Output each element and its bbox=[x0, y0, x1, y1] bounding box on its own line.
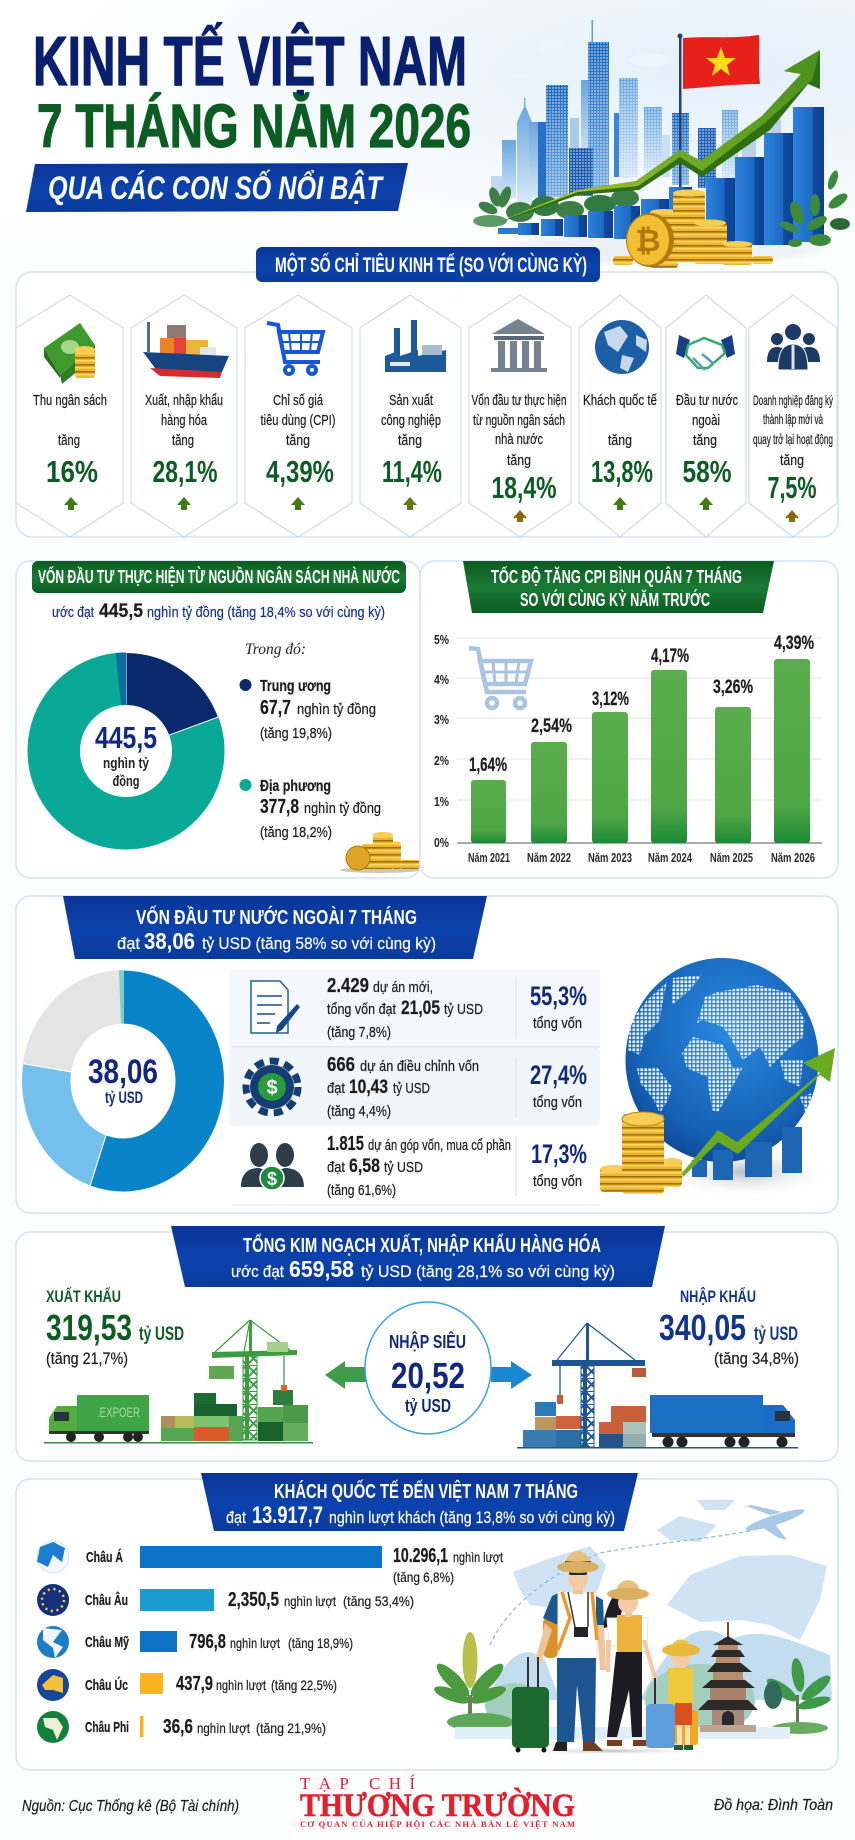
row: adjusted capital: tổng vốn bbox=[533, 1094, 582, 1111]
bar chart: 1% bbox=[434, 794, 449, 809]
card: international visitors: tăng bbox=[608, 432, 632, 449]
row: Americas: nghìn lượt bbox=[230, 1635, 280, 1651]
donut chart: nghìn tỷ bbox=[103, 755, 150, 772]
trade deficit circle: NHẬP SIÊU bbox=[389, 1331, 466, 1352]
arrow bbox=[513, 510, 527, 522]
card: enterprises: 7,5% bbox=[768, 470, 816, 505]
heading: VỐN ĐẦU TƯ NƯỚC NGOÀI 7 THÁNG bbox=[136, 905, 417, 929]
row: adjusted capital: (tăng 4,4%) bbox=[327, 1103, 391, 1120]
row: Europe: nghìn lượt bbox=[284, 1593, 336, 1609]
trade deficit circle bbox=[365, 1302, 491, 1434]
imports figures: 340,05 bbox=[659, 1307, 746, 1348]
illustration: export port bbox=[44, 1320, 313, 1444]
bar chart: 5% bbox=[434, 632, 449, 647]
icon: business people bbox=[767, 324, 820, 370]
row: capital contributions: (tăng 61,6%) bbox=[327, 1182, 396, 1199]
footer: magazine logo bbox=[300, 1774, 575, 1829]
row: new projects: dự án mới, bbox=[373, 979, 433, 996]
legend: 67,7 bbox=[260, 697, 291, 719]
row: capital contributions: 1.815 bbox=[327, 1133, 364, 1155]
card: import export: hàng hóa bbox=[161, 412, 207, 429]
card: CPI: tiêu dùng (CPI) bbox=[260, 412, 336, 429]
row: capital contributions: đạt bbox=[327, 1159, 346, 1176]
card: import export: Xuất, nhập khẩu bbox=[145, 392, 223, 409]
icon: bank building bbox=[491, 319, 547, 372]
suitcase: yellow bbox=[675, 1710, 698, 1745]
heading: tỷ USD (tăng 28,1% so với cùng kỳ) bbox=[361, 1262, 615, 1281]
row: Asia: 10.296,1 bbox=[393, 1545, 448, 1567]
row: Americas: (tăng 18,9%) bbox=[288, 1635, 353, 1651]
card: state budget investment: tăng bbox=[507, 452, 531, 469]
footer: credit: Đồ họa: Đình Toàn bbox=[714, 1797, 833, 1814]
card: budget revenue: 16% bbox=[46, 454, 98, 489]
trade deficit circle: tỷ USD bbox=[405, 1396, 451, 1416]
legend: (tăng 18,2%) bbox=[260, 824, 332, 841]
row: Oceania bbox=[37, 1669, 337, 1701]
card: enterprises bbox=[749, 295, 837, 537]
heading: tỷ USD (tăng 58% so với cùng kỳ) bbox=[202, 934, 436, 953]
row backgrounds bbox=[229, 970, 600, 1205]
panel: economic indicators bbox=[16, 247, 838, 537]
card: industry: tăng bbox=[398, 432, 422, 449]
icon: Americas globe bbox=[37, 1626, 69, 1658]
suitcase: blue bbox=[646, 1678, 675, 1748]
arrow bbox=[291, 497, 305, 510]
arrow bbox=[177, 497, 191, 510]
bar chart: 4,39% bbox=[774, 633, 814, 654]
bar chart: Năm 2025 bbox=[710, 851, 753, 865]
card: state budget investment: từ nguồn ngân sách bbox=[473, 412, 565, 429]
pagoda bbox=[698, 1622, 758, 1732]
icon: shopping cart bbox=[469, 648, 531, 708]
card: foreign investment: Đầu tư nước bbox=[676, 392, 738, 409]
panel: state budget investment bbox=[16, 561, 420, 878]
row: capital contributions: dự án góp vốn, mua cổ phần bbox=[368, 1137, 511, 1154]
airplane bbox=[744, 1505, 806, 1540]
bar chart: 3,26% bbox=[713, 677, 753, 698]
card: budget revenue bbox=[16, 295, 123, 537]
plant right bbox=[778, 169, 850, 247]
bar chart: Năm 2022 bbox=[527, 851, 571, 865]
row: Asia: nghìn lượt bbox=[453, 1549, 503, 1565]
heading bbox=[171, 1226, 665, 1287]
water bbox=[455, 1727, 790, 1739]
growth arrow bbox=[682, 1048, 835, 1177]
heading: TỐC ĐỘ TĂNG CPI BÌNH QUÂN 7 THÁNG bbox=[491, 566, 742, 587]
row: Africa: 36,6 bbox=[163, 1716, 193, 1738]
bar chart: Năm 2021 bbox=[468, 851, 510, 865]
crane bbox=[209, 1320, 297, 1440]
bar chart: 3,12% bbox=[592, 689, 629, 710]
row: adjusted capital: 27,4% bbox=[530, 1060, 587, 1090]
title block bbox=[26, 21, 471, 212]
row: Asia: Châu Á bbox=[86, 1549, 123, 1566]
row: adjusted capital bbox=[246, 1054, 587, 1120]
card: foreign investment: tăng bbox=[693, 432, 717, 449]
heading: ước đạt bbox=[231, 1262, 284, 1281]
heading: 659,58 bbox=[289, 1256, 354, 1282]
skyline bbox=[491, 20, 781, 206]
card: import export: tăng bbox=[172, 432, 194, 449]
imports figures: tỷ USD bbox=[754, 1324, 798, 1345]
imports figures: (tăng 34,8%) bbox=[714, 1349, 799, 1368]
header illustration: city, bars, arrow, flag, coins bbox=[465, 20, 855, 270]
heading: KHÁCH QUỐC TẾ ĐẾN VIỆT NAM 7 THÁNG bbox=[274, 1479, 578, 1503]
world map bbox=[513, 1500, 827, 1640]
donut chart: đồng bbox=[112, 773, 140, 790]
card: import export: 28,1% bbox=[152, 454, 218, 489]
icon: earth bbox=[595, 320, 649, 374]
icon: Oceania globe bbox=[37, 1669, 69, 1701]
panel: foreign investment bbox=[16, 896, 838, 1213]
card: budget revenue: tăng bbox=[58, 432, 80, 449]
growth arrow bbox=[498, 50, 820, 223]
bar chart: 4% bbox=[434, 672, 449, 687]
card: international visitors bbox=[579, 295, 661, 537]
coins bbox=[613, 190, 773, 268]
clouds bbox=[513, 42, 670, 80]
row: adjusted capital: 10,43 bbox=[349, 1077, 388, 1098]
row: capital contributions: tổng vốn bbox=[533, 1173, 582, 1190]
card: CPI: tăng bbox=[286, 432, 310, 449]
row: Oceania: Châu Úc bbox=[85, 1676, 128, 1694]
suitcase: green bbox=[512, 1657, 549, 1752]
exports figures: tỷ USD bbox=[139, 1324, 184, 1345]
heading bbox=[201, 1473, 638, 1531]
row: capital contributions: 17,3% bbox=[531, 1139, 587, 1169]
legend: (tăng 19,8%) bbox=[260, 725, 332, 742]
card: state budget investment bbox=[469, 295, 571, 537]
row: Oceania: 437,9 bbox=[176, 1673, 213, 1695]
flag pole bbox=[678, 34, 682, 187]
truck bbox=[49, 1395, 149, 1442]
trade deficit circle: 20,52 bbox=[391, 1355, 465, 1396]
illustration: world map and travel family bbox=[432, 1500, 834, 1755]
icon: document and pen bbox=[251, 981, 300, 1033]
imports figures bbox=[659, 1287, 799, 1368]
heading: TỔNG KIM NGẠCH XUẤT, NHẬP KHẨU HÀNG HÓA bbox=[243, 1233, 601, 1257]
subtitle banner: QUA CÁC CON SỐ NỔI BẬT bbox=[48, 170, 384, 206]
row: adjusted capital: dự án điều chỉnh vốn bbox=[360, 1058, 479, 1075]
icon: handshake bbox=[676, 335, 735, 370]
row: new projects: 21,05 bbox=[401, 998, 440, 1019]
exports figures: 319,53 bbox=[46, 1307, 132, 1348]
icon: investors with dollar: $ bbox=[267, 1169, 277, 1189]
foliage bbox=[473, 185, 639, 227]
arrow bbox=[699, 497, 713, 510]
heading: VỐN ĐẦU TƯ THỰC HIỆN TỪ NGUỒN NGÂN SÁCH NHÀ NƯỚC bbox=[38, 566, 400, 587]
bar chart: 2% bbox=[434, 753, 449, 768]
row: Africa: Châu Phi bbox=[85, 1719, 129, 1736]
legend: Trung ương bbox=[260, 678, 331, 695]
card: CPI: 4,39% bbox=[266, 454, 334, 489]
icon: cargo ship bbox=[143, 322, 229, 378]
row: Oceania: (tăng 22,5%) bbox=[271, 1677, 337, 1693]
row: new projects: tổng vốn đạt bbox=[327, 1001, 397, 1018]
row: adjusted capital: 666 bbox=[327, 1054, 355, 1076]
subheading bbox=[52, 601, 385, 622]
card: industry bbox=[360, 295, 461, 537]
legend: nghìn tỷ đồng bbox=[297, 701, 376, 718]
legend: 377,8 bbox=[260, 796, 299, 818]
footer: magazine logo: THƯƠNG TRƯỜNG bbox=[300, 1786, 575, 1824]
footer: source: Nguồn: Cục Thống kê (Bộ Tài chính) bbox=[22, 1798, 239, 1815]
panel: international visitors bbox=[16, 1473, 838, 1770]
icon: coins bbox=[340, 832, 420, 873]
row: Europe: Châu Âu bbox=[85, 1591, 128, 1609]
bar chart: 1,64% bbox=[469, 755, 507, 776]
heading: đạt bbox=[117, 934, 140, 953]
card: CPI: Chỉ số giá bbox=[273, 392, 323, 409]
row: Americas bbox=[37, 1626, 353, 1658]
subheading: ước đạt bbox=[52, 604, 95, 621]
containers bbox=[161, 1390, 308, 1441]
heading pill: MỘT SỐ CHỈ TIÊU KINH TẾ (SO VỚI CÙNG KỲ) bbox=[275, 253, 587, 277]
footer: magazine logo: TẠP CHÍ bbox=[300, 1774, 415, 1793]
coins: ₿ bbox=[635, 223, 661, 258]
bar chart: Năm 2026 bbox=[771, 851, 815, 865]
card: enterprises: tăng bbox=[780, 452, 804, 469]
subheading: 445,5 bbox=[99, 601, 143, 622]
person: man bbox=[535, 1551, 606, 1751]
icon: Africa globe bbox=[37, 1711, 69, 1743]
bar chart bbox=[434, 632, 822, 865]
person: woman bbox=[604, 1580, 658, 1746]
arrow bbox=[613, 497, 627, 510]
card: industry: 11,4% bbox=[382, 454, 442, 489]
card: CPI bbox=[245, 295, 352, 537]
footer: magazine logo: CƠ QUAN CỦA HIỆP HỘI CÁC NHÀ BÁN LẺ VIỆT NAM bbox=[300, 1819, 575, 1829]
icon: money and coins bbox=[44, 323, 95, 384]
legend: Địa phương bbox=[260, 778, 331, 795]
heading pill bbox=[256, 247, 600, 282]
donut chart: 38,06 bbox=[88, 1053, 158, 1091]
palm left bbox=[432, 1632, 513, 1731]
subheading: nghìn tỷ đồng (tăng 18,4% so với cùng kỳ) bbox=[147, 604, 385, 621]
title: line 1: KINH TẾ VIỆT NAM bbox=[33, 21, 467, 100]
row: new projects: tỷ USD bbox=[444, 1001, 483, 1018]
imports figures: NHẬP KHẨU bbox=[680, 1287, 756, 1306]
heading: nghìn lượt khách (tăng 13,8% so với cùng kỳ) bbox=[329, 1508, 615, 1527]
card: import export bbox=[131, 295, 237, 537]
heading: đạt bbox=[226, 1508, 246, 1527]
icon: gear with dollar: $ bbox=[266, 1077, 278, 1099]
panel: import export bbox=[16, 1226, 838, 1461]
arrow bbox=[785, 510, 799, 522]
heading: 38,06 bbox=[144, 928, 195, 954]
illustration: import port bbox=[517, 1323, 798, 1448]
heading: 13.917,7 bbox=[252, 1502, 323, 1529]
icon: Asia globe bbox=[37, 1541, 69, 1573]
card: international visitors: Khách quốc tế bbox=[583, 392, 658, 409]
row: capital contributions: 6,58 bbox=[349, 1156, 380, 1177]
card: budget revenue: Thu ngân sách bbox=[33, 392, 107, 409]
icon: Europe globe bbox=[37, 1584, 69, 1616]
heading: SO VỚI CÙNG KỲ NĂM TRƯỚC bbox=[520, 589, 710, 610]
row: Asia bbox=[37, 1541, 503, 1585]
arrow: left green bbox=[325, 1361, 366, 1389]
card: foreign investment: 58% bbox=[682, 454, 732, 489]
bar chart: Năm 2023 bbox=[588, 851, 632, 865]
legend: nghìn tỷ đồng bbox=[304, 800, 381, 817]
containers bbox=[523, 1402, 646, 1447]
title: line 2: 7 THÁNG NĂM 2026 bbox=[37, 92, 471, 160]
heading bbox=[463, 561, 774, 613]
row: Oceania: nghìn lượt bbox=[216, 1677, 266, 1693]
truck: .EXPOER bbox=[97, 1404, 140, 1420]
row: Africa: (tăng 21,9%) bbox=[256, 1720, 326, 1736]
card: foreign investment bbox=[666, 295, 746, 537]
row: capital contributions bbox=[241, 1133, 587, 1199]
bar chart: 2,54% bbox=[531, 716, 572, 737]
coins bbox=[600, 1112, 682, 1194]
subtitle banner bbox=[26, 163, 408, 212]
crane bbox=[552, 1323, 646, 1447]
bar chart: Năm 2024 bbox=[648, 851, 692, 865]
card: foreign investment: ngoài bbox=[692, 412, 720, 429]
donut chart: tỷ USD bbox=[105, 1088, 143, 1107]
arrow bbox=[64, 497, 78, 510]
exports figures: (tăng 21,7%) bbox=[46, 1349, 128, 1368]
row: Asia: (tăng 6,8%) bbox=[393, 1569, 454, 1585]
flag bbox=[683, 35, 760, 89]
row: new projects bbox=[251, 975, 587, 1041]
icon: shopping cart bbox=[267, 323, 323, 374]
row: new projects: (tăng 7,8%) bbox=[327, 1024, 391, 1041]
row: new projects: 55,3% bbox=[530, 981, 587, 1011]
rising bars bbox=[498, 107, 824, 245]
bar chart: 4,17% bbox=[651, 646, 689, 667]
arrow bbox=[403, 497, 417, 510]
card: state budget investment: nhà nước bbox=[495, 431, 543, 448]
bar chart: 0% bbox=[434, 835, 449, 850]
card: state budget investment: 18,4% bbox=[492, 470, 556, 505]
icon: gear with dollar bbox=[246, 1061, 298, 1113]
exports figures bbox=[46, 1287, 184, 1368]
row: Europe: (tăng 53,4%) bbox=[343, 1593, 414, 1609]
heading bbox=[63, 896, 487, 959]
heading bbox=[32, 561, 406, 593]
card: international visitors: 13,8% bbox=[591, 454, 653, 489]
row: new projects: 2.429 bbox=[327, 975, 369, 997]
card: industry: công nghiệp bbox=[381, 412, 441, 429]
person: child bbox=[662, 1640, 700, 1750]
row: Europe bbox=[37, 1584, 414, 1616]
palm right bbox=[764, 1657, 834, 1734]
bar chart: 3% bbox=[434, 712, 449, 727]
row: new projects: tổng vốn bbox=[533, 1015, 582, 1032]
exports figures: XUẤT KHẨU bbox=[46, 1287, 121, 1306]
donut chart bbox=[22, 970, 224, 1192]
row: Europe: 2,350,5 bbox=[228, 1589, 279, 1611]
row: Americas: Châu Mỹ bbox=[85, 1634, 129, 1651]
row: Africa bbox=[37, 1711, 326, 1743]
card: industry: Sản xuất bbox=[389, 392, 434, 409]
row: Africa: nghìn lượt bbox=[197, 1720, 250, 1736]
icon: factory bbox=[385, 320, 446, 372]
legend: Trong đó: bbox=[245, 641, 306, 658]
card: state budget investment: Vốn đầu tư thực hiện bbox=[472, 392, 566, 409]
mountains bbox=[485, 1630, 832, 1736]
legend bbox=[240, 641, 381, 841]
row: Americas: 796,8 bbox=[189, 1631, 226, 1653]
panel: CPI chart bbox=[420, 561, 838, 878]
truck bbox=[650, 1395, 795, 1448]
illustration: globe, coins, arrow bbox=[600, 958, 835, 1198]
donut chart: 445,5 bbox=[95, 720, 157, 755]
row: adjusted capital: đạt bbox=[327, 1080, 346, 1097]
row: capital contributions: tỷ USD bbox=[384, 1159, 423, 1176]
donut chart bbox=[28, 652, 224, 850]
arrow: right blue bbox=[491, 1361, 532, 1389]
row: adjusted capital: tỷ USD bbox=[393, 1080, 430, 1097]
globe bbox=[626, 958, 818, 1162]
icon: investors with dollar bbox=[241, 1143, 304, 1190]
